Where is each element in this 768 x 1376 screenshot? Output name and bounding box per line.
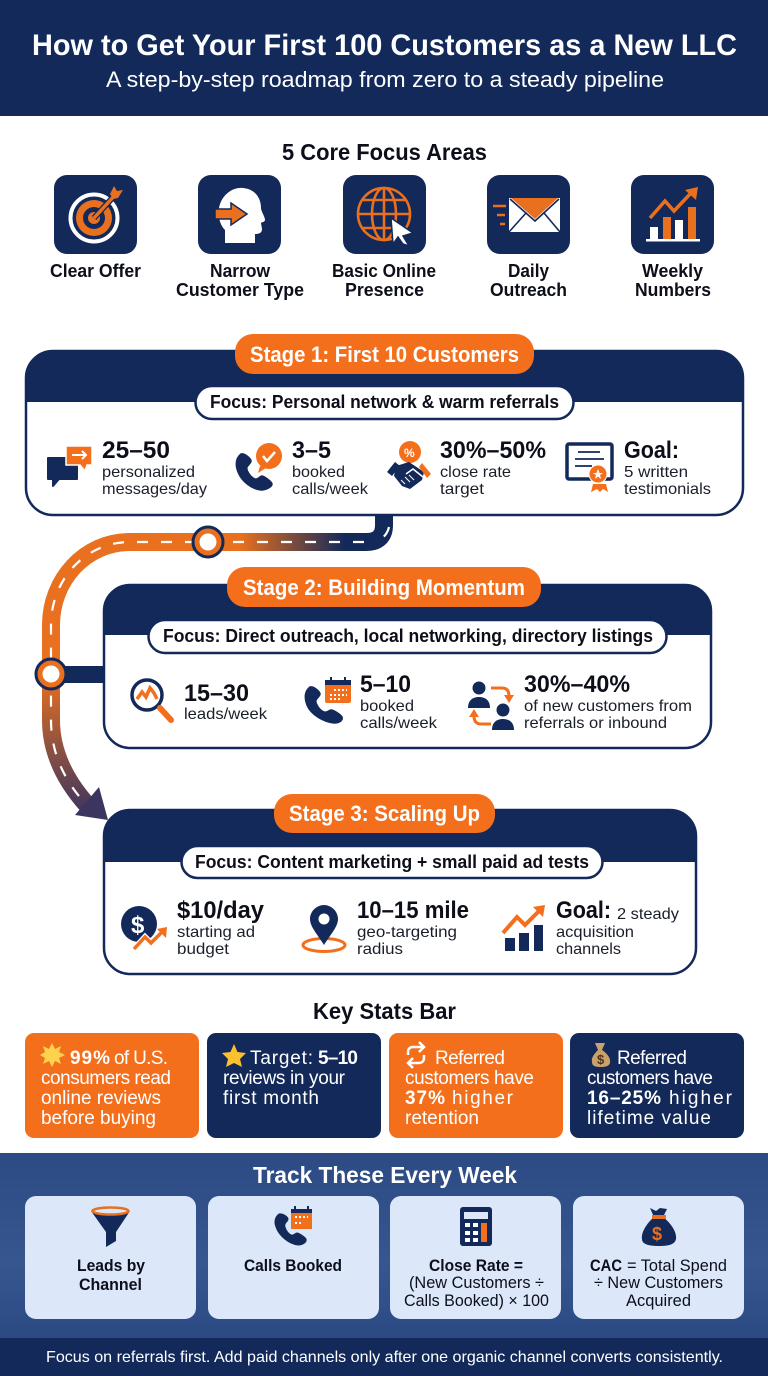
stat: ad budget: $10/day [177,897,265,924]
metric card: calls booked: Calls Booked [244,1257,342,1275]
stat: leads per week [132,680,268,723]
stat card: retention [389,1033,563,1138]
stat: close rate [387,437,546,498]
stat: close rate: target [440,481,485,498]
stat card: lifetime value: $ [597,1052,605,1067]
stage 3 badge: Stage 3: Scaling Up [289,801,480,826]
stat: referrals or inbound: 30%–40% [524,671,630,698]
stat card: reviews: consumers read [41,1068,171,1089]
metric card: cac [573,1196,744,1319]
stat: ad budget: starting ad [177,924,255,941]
stat: booked calls: booked [360,698,414,715]
stat card: lifetime value: higher [669,1088,733,1109]
stat: ad budget: budget [177,941,230,958]
label: Daily [508,261,549,281]
stat card: retention: 37% [405,1088,445,1109]
stat: geo-targeting radius: 10–15 mile [357,897,469,924]
stat card: reviews: online reviews [41,1088,161,1109]
stat card: review target: reviews in your [223,1068,346,1089]
focus area: clear offer [50,175,141,281]
stat: close rate: 30%–50% [440,437,546,464]
stat: booked calls: calls/week [360,715,438,732]
roadmap road connecting the stages [36,514,389,820]
section: track these every week [0,1153,768,1338]
focus area: daily outreach [487,175,570,300]
heading: key stats bar: Key Stats Bar [313,998,456,1024]
stat: geo-targeting radius: geo-targeting [357,924,457,941]
stat: messages per day: 25–50 [102,437,170,464]
metric card: cac: ÷ New Customers [594,1274,723,1292]
metric card: leads by channel: Channel [79,1276,142,1294]
stat card: lifetime value: lifetime value [587,1108,711,1129]
stat: acquisition channels goal [503,897,679,958]
heading: 5 core focus areas: 5 Core Focus Areas [282,139,487,165]
stage 1 focus pill: Focus: Personal network & warm referrals [210,392,559,412]
stat card: retention: higher [452,1088,514,1109]
stat: leads per week: leads/week [184,706,268,723]
stat: ad budget: $ [131,912,145,939]
metric card: leads by channel [25,1196,196,1319]
stat: referrals or inbound: of new customers from [524,698,692,715]
heading: track these every week: Track These Every Week [253,1162,517,1188]
stat: testimonials goal [567,437,711,498]
stat: messages per day [48,437,207,498]
stat: testimonials goal: Goal: [624,437,679,464]
stat: referrals or inbound: referrals or inbound [524,715,667,732]
metric card: cac: $ [652,1224,662,1244]
stat: referrals or inbound [468,671,692,732]
metric card: cac: CAC [590,1257,622,1275]
metric card: close rate: Calls Booked) × 100 [404,1292,549,1310]
metric card: calls booked [208,1196,379,1319]
stat: close rate: % [404,446,415,460]
focus area: weekly numbers: Numbers [635,280,711,300]
stat card: review target: first month [223,1088,319,1109]
stat card: lifetime value: 16–25% [587,1088,661,1109]
stat: close rate: close rate [440,464,511,481]
connector to stage 2 [60,666,105,683]
stage 1 badge [235,334,534,374]
stat: booked calls: calls/week [292,481,369,498]
focus area: daily outreach: Outreach [490,280,567,300]
stat: messages per day: personalized [102,464,195,481]
stage 1 focus pill [196,386,574,419]
stage 3 focus pill: Focus: Content marketing + small paid ad tests [195,852,589,872]
stat: ad budget [121,897,265,958]
stat: geo-targeting radius [303,897,469,958]
stat: booked calls: booked [292,464,345,481]
stat card: lifetime value: customers have [587,1068,713,1089]
metric card: close rate: Close Rate = [429,1257,523,1275]
stat card: retention: customers have [405,1068,534,1089]
subtitle: A step-by-step roadmap from zero to a steady pipeline [106,67,664,92]
stat card: retention: retention [405,1108,479,1129]
panel: stage 1 [26,334,743,515]
stat: testimonials goal: 5 written [624,464,688,481]
stage 3 badge [274,794,495,833]
stat: booked calls: 3–5 [292,437,331,464]
focus area: basic online presence: Presence [345,280,424,300]
focus area: basic online presence [332,175,436,300]
stat: testimonials goal: testimonials [624,481,711,498]
stat: acquisition channels goal: 2 steady [617,906,679,923]
stat card: review target: Target: [250,1048,313,1069]
stat: messages per day: messages/day [102,481,207,498]
focus area: narrow customer type [176,175,304,300]
footer banner [0,1338,768,1376]
metric card: cac: = Total Spend [627,1257,727,1275]
stage 1 badge: Stage 1: First 10 Customers [250,342,519,367]
panel: stage 2 [104,567,711,748]
panel: stage 3 [104,794,696,974]
waypoint 2 [36,659,66,689]
stat card: reviews: before buying [41,1108,156,1129]
stat: booked calls: 5–10 [360,671,411,698]
stat: leads per week: 15–30 [184,680,249,707]
section: key stats bar [25,998,744,1138]
metric card: leads by channel: Leads by [77,1257,146,1275]
header banner [0,0,768,116]
stat: geo-targeting radius: radius [357,941,403,958]
stat: acquisition channels goal: Goal: [556,897,611,924]
label: Basic Online [332,261,436,281]
title: How to Get Your First 100 Customers as a New LLC [32,29,737,62]
stat card: retention: Referred [435,1048,505,1069]
label: Narrow [210,261,271,281]
metric card: cac: Acquired [626,1292,691,1310]
stage 2 focus pill [148,620,666,653]
metric card: close rate: (New Customers ÷ [409,1274,544,1292]
stage 2 badge: Stage 2: Building Momentum [243,575,525,600]
metric card: close rate [390,1196,561,1319]
stat: acquisition channels goal: channels [556,941,621,958]
stat: acquisition channels goal: acquisition [556,924,634,941]
stat: booked calls [236,437,369,498]
section: 5 core focus areas [50,139,714,300]
stage 2 focus pill: Focus: Direct outreach, local networking, directory listings [163,626,653,646]
stat card: lifetime value [570,1033,744,1138]
label: Weekly [642,261,703,281]
stat card: reviews: of U.S. [114,1048,168,1069]
stat: booked calls [305,671,438,732]
label: Clear Offer [50,261,141,281]
waypoint 1 [193,527,223,557]
focus area: narrow customer type: Customer Type [176,280,304,300]
stat card: lifetime value: Referred [617,1048,687,1069]
stage 2 badge [227,567,541,607]
stat card: reviews: 99% [70,1048,110,1069]
stat card: review target: 5–10 [318,1048,358,1069]
footer banner: Focus on referrals first. Add paid channels only after one organic channel converts consistently. [46,1349,723,1366]
stat card: reviews [25,1033,199,1138]
stage 3 focus pill [182,846,602,878]
focus area: weekly numbers [631,175,714,300]
stat card: review target [207,1033,381,1138]
